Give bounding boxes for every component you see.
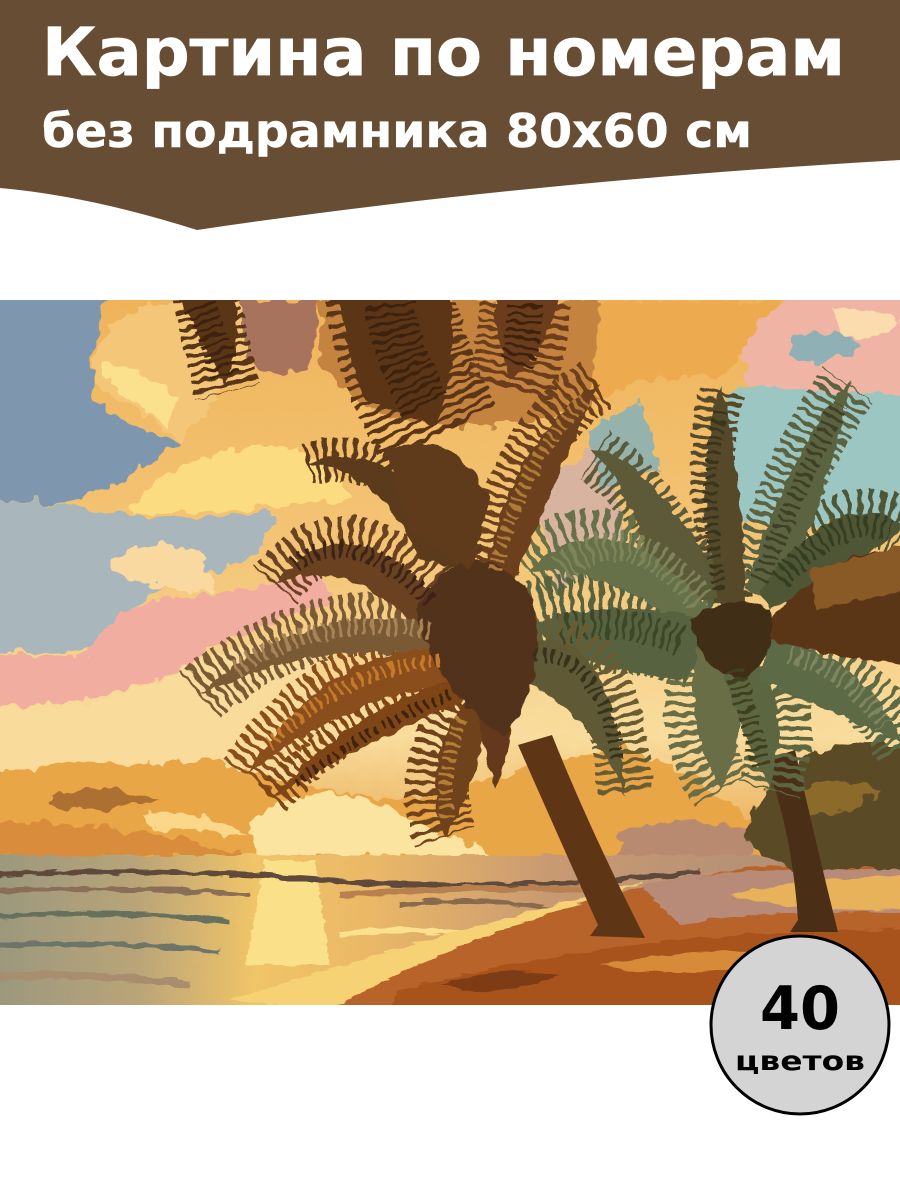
header banner <box>0 0 900 230</box>
front palm trunk <box>518 735 645 938</box>
rear palm trunk <box>765 750 838 932</box>
front frond texture <box>200 305 618 820</box>
front palm <box>180 295 626 836</box>
label цветов: цветов <box>735 1046 865 1077</box>
rear palm <box>528 380 900 790</box>
bush highlights <box>800 780 880 816</box>
sun reflection <box>245 860 330 965</box>
subtitle: без подрамника 80х60 см <box>42 104 752 158</box>
sea <box>0 853 786 1005</box>
painting: palm beach at sunset <box>0 300 900 1005</box>
foreground beach <box>230 864 900 1005</box>
colour count badge <box>711 936 889 1114</box>
horizon clouds <box>0 745 760 860</box>
distant bush <box>745 742 900 868</box>
top hanging fronds <box>180 295 560 435</box>
sky <box>0 260 900 870</box>
front palm fronds <box>200 384 626 836</box>
rear palm fronds <box>528 380 900 790</box>
rear frond texture <box>560 405 890 770</box>
wave lines <box>0 872 700 985</box>
number 40: 40 <box>760 974 840 1044</box>
title: Картина по номерам <box>42 14 845 91</box>
